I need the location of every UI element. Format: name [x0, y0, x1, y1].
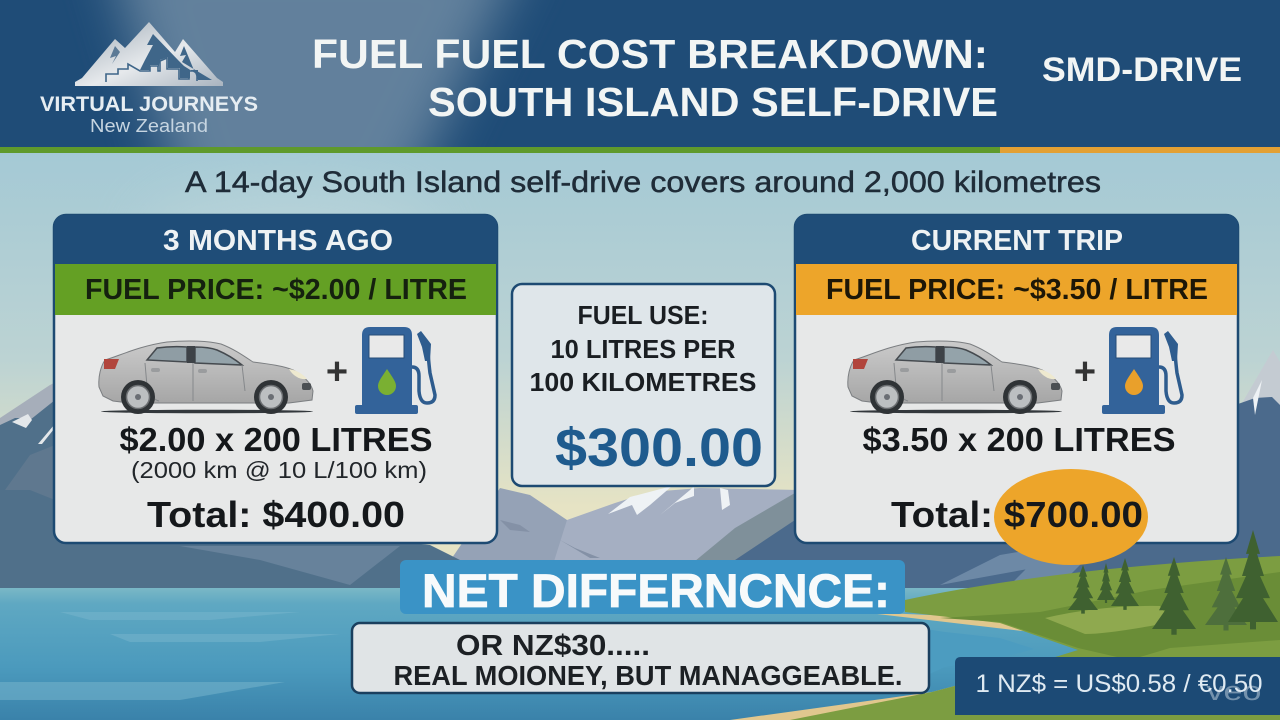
icon: car — [848, 341, 1062, 414]
saving amount: $300.00 — [555, 418, 763, 478]
background: alpine lake landscape — [0, 150, 1280, 720]
calculation: $3.50 x 200 LITRES — [862, 421, 1176, 458]
fuel price strip: FUEL PRICE: ~$2.00 / LITRE — [85, 274, 467, 306]
title: FUEL FUEL COST BREAKDOWN: — [312, 31, 988, 77]
panel: 3 months ago — [54, 215, 497, 543]
panel: current trip — [795, 215, 1238, 565]
panel: 3 months ago: (2000 km @ 10 L/100 km) — [131, 457, 427, 483]
plus sign: + — [326, 351, 348, 393]
panel heading: 3 MONTHS AGO — [163, 225, 393, 257]
callout: real money: REAL MOIONEY, BUT MANAGGEABLE. — [394, 660, 902, 691]
net difference heading: NET DIFFERNCNCE: — [422, 564, 890, 617]
total: Total: $700.00 — [891, 494, 1143, 535]
far peaks — [0, 380, 60, 470]
centre mountains — [430, 488, 640, 590]
fuel price strip: FUEL PRICE: ~$3.50 / LITRE — [826, 274, 1208, 306]
callout: real money — [352, 623, 929, 693]
trees — [1068, 530, 1278, 635]
panel: fuel use: 100 KILOMETRES — [530, 367, 756, 397]
sand — [730, 612, 1100, 720]
panel heading: CURRENT TRIP — [911, 225, 1123, 257]
panel: fuel use: FUEL USE: — [578, 300, 708, 330]
logo: Virtual Journeys New Zealand: New Zealand — [90, 116, 208, 136]
title — [312, 31, 998, 125]
calculation: $2.00 x 200 LITRES — [120, 421, 432, 458]
callout: real money: OR NZ$30..... — [456, 630, 650, 662]
header banner — [0, 0, 1280, 153]
right dark mountain — [690, 397, 1280, 600]
exchange rate box: 1 NZ$ = US$0.58 / €0.50 — [976, 670, 1262, 698]
logo: Virtual Journeys New Zealand — [40, 22, 258, 136]
fuel price strip — [796, 264, 1237, 315]
logo: Virtual Journeys New Zealand: VIRTUAL JOURNEYS — [40, 93, 258, 116]
exchange rate box — [955, 657, 1280, 715]
left dark mountain — [0, 400, 520, 590]
badge: SMD-DRIVE: SMD-DRIVE — [1042, 51, 1242, 89]
icon: car — [99, 341, 313, 414]
lake — [0, 588, 1100, 720]
panel: fuel use: 10 LITRES PER — [550, 334, 736, 364]
plus sign: + — [1074, 351, 1096, 393]
icon: fuel pump, green drop — [355, 327, 435, 414]
subtitle: A 14-day South Island self-drive covers around 2,000 kilometres — [185, 166, 1101, 199]
total: Total: $400.00 — [147, 494, 405, 535]
highlight oval — [994, 469, 1148, 565]
watermark: veo — [1206, 676, 1262, 706]
icon: silver mountains with skyline — [75, 22, 223, 86]
icon: fuel pump, orange drop — [1102, 327, 1182, 414]
panel: fuel use — [512, 284, 775, 486]
inner lake bay — [880, 622, 1034, 685]
title: SOUTH ISLAND SELF-DRIVE — [428, 79, 998, 125]
green bank — [790, 556, 1280, 720]
fuel price strip — [55, 264, 496, 315]
